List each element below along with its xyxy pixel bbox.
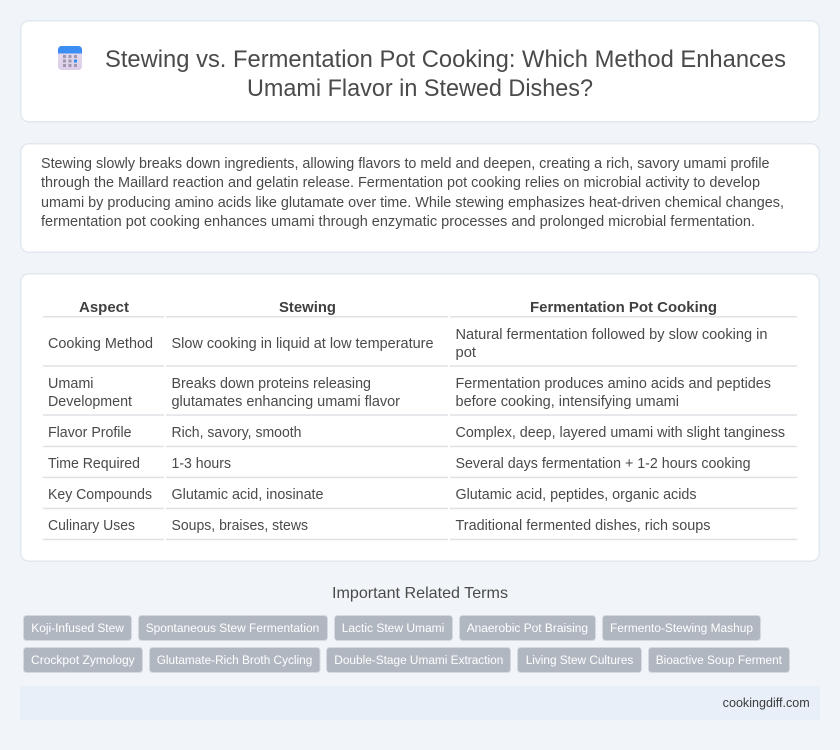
tag: Anaerobic Pot Braising: Anaerobic Pot Braising <box>467 621 588 635</box>
heading: important related terms: Important Related Terms <box>332 585 508 602</box>
row: umami development: Development <box>48 394 132 410</box>
row: culinary uses: Soups, braises, stews <box>172 518 308 534</box>
title <box>105 46 786 102</box>
row: umami development <box>48 376 771 410</box>
tag: Glutamate-Rich Broth Cycling: Glutamate-Rich Broth Cycling <box>157 653 312 667</box>
row: culinary uses: Traditional fermented dishes, rich soups <box>456 518 710 534</box>
row: time required: Several days fermentation + 1-2 hours cooking <box>456 456 750 472</box>
row: cooking method: Cooking Method <box>48 336 153 352</box>
tag: Bioactive Soup Ferment <box>648 648 790 672</box>
tag: Fermento-Stewing Mashup: Fermento-Stewing Mashup <box>610 621 753 635</box>
tag: Crockpot Zymology <box>24 648 142 672</box>
table header row: Stewing <box>279 300 336 316</box>
row: umami development: Fermentation produces amino acids and peptides <box>456 376 771 392</box>
title: Umami Flavor in Stewed Dishes? <box>247 75 593 102</box>
text block: introduction <box>41 156 784 230</box>
tag: Spontaneous Stew Fermentation <box>138 616 328 640</box>
panel: comparison table <box>21 274 819 561</box>
row: culinary uses <box>48 518 710 534</box>
tag: Lactic Stew Umami <box>334 616 452 640</box>
row: umami development: Umami <box>48 376 94 392</box>
row: cooking method: Natural fermentation followed by slow cooking in <box>456 327 768 343</box>
tag: Double-Stage Umami Extraction <box>326 648 510 672</box>
tag: Bioactive Soup Ferment: Bioactive Soup Ferment <box>656 653 783 667</box>
text block: introduction: through the Maillard reaction and gelatin release. Fermentation pot cooking relies on microbial activity to develop <box>41 175 760 191</box>
tag: Double-Stage Umami Extraction: Double-Stage Umami Extraction <box>334 653 503 667</box>
text block: introduction: fermentation pot cooking enhances umami through enzymatic processes and prolonged microbial fermentation. <box>41 214 755 230</box>
row: time required: Time Required <box>48 456 140 472</box>
row: cooking method <box>48 327 768 361</box>
row: flavor profile: Rich, savory, smooth <box>172 425 302 441</box>
row: time required <box>48 456 750 472</box>
footer <box>20 686 820 720</box>
row: umami development: Breaks down proteins releasing <box>172 376 371 392</box>
row: flavor profile: Flavor Profile <box>48 425 132 441</box>
row: time required: 1-3 hours <box>172 456 231 472</box>
table header row: Fermentation Pot Cooking <box>530 300 717 316</box>
tag: Anaerobic Pot Braising <box>460 616 596 640</box>
row: umami development: glutamates enhancing umami flavor <box>172 394 400 410</box>
row: key compounds <box>48 487 696 503</box>
text block: introduction: umami by producing amino acids like glutamate over time. While stewing emphasizes heat-driven chemical changes, <box>41 195 784 211</box>
panel: introduction <box>21 144 819 252</box>
table header row: Aspect <box>79 300 129 316</box>
row: key compounds: Glutamic acid, peptides, organic acids <box>456 487 696 503</box>
row: cooking method: Slow cooking in liquid at low temperature <box>172 336 434 352</box>
tag: Koji-Infused Stew <box>24 616 132 640</box>
tag: Crockpot Zymology: Crockpot Zymology <box>31 653 136 667</box>
tag: Living Stew Cultures <box>518 648 642 672</box>
title: Stewing vs. Fermentation Pot Cooking: Which Method Enhances <box>105 46 786 73</box>
row: culinary uses: Culinary Uses <box>48 518 135 534</box>
tag: Spontaneous Stew Fermentation: Spontaneous Stew Fermentation <box>146 621 319 635</box>
tag: Lactic Stew Umami: Lactic Stew Umami <box>342 621 444 635</box>
icon: calendar <box>58 46 82 70</box>
tag: Koji-Infused Stew: Koji-Infused Stew <box>31 621 124 635</box>
row: key compounds: Key Compounds <box>48 487 152 503</box>
tag: Living Stew Cultures: Living Stew Cultures <box>526 653 633 667</box>
row: cooking method: pot <box>456 345 476 361</box>
tag: Glutamate-Rich Broth Cycling <box>150 648 320 672</box>
tags: related terms <box>24 616 790 672</box>
row: flavor profile <box>48 425 785 441</box>
row: key compounds: Glutamic acid, inosinate <box>172 487 324 503</box>
footer: cookingdiff.com <box>723 696 810 710</box>
tag: Fermento-Stewing Mashup <box>602 616 760 640</box>
text block: introduction: Stewing slowly breaks down ingredients, allowing flavors to meld and deepen, creating a rich, savory umami profile <box>41 156 770 172</box>
table header row <box>79 300 717 316</box>
panel: header <box>21 21 819 122</box>
row: umami development: before cooking, intensifying umami <box>456 394 679 410</box>
row: flavor profile: Complex, deep, layered umami with slight tanginess <box>456 425 785 441</box>
